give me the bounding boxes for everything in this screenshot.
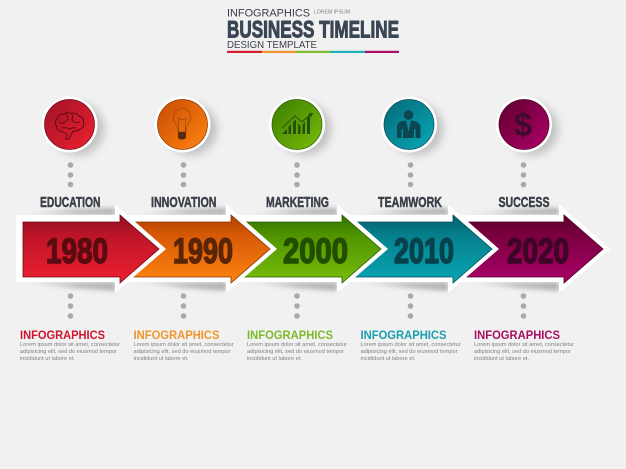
step 5: success 2020 <box>460 96 610 362</box>
step 2: innovation 1990 <box>127 96 277 362</box>
text block <box>20 328 120 362</box>
label: success: SUCCESS <box>498 194 550 211</box>
arrow 1990: 1990 <box>173 232 233 271</box>
text block: Lorem ipsum dolor sit amet, consectetur <box>20 342 120 348</box>
circle icon: brain <box>42 96 104 155</box>
dots lower <box>181 293 186 319</box>
label: innovation: INNOVATION <box>151 194 216 211</box>
dots upper <box>294 162 300 187</box>
text block: incididunt ut labore et. <box>20 356 75 362</box>
text block <box>474 328 574 362</box>
circle icon: dollar <box>496 96 558 155</box>
title: infographics: INFOGRAPHICS <box>227 8 310 20</box>
text block <box>134 328 234 362</box>
title colour bar <box>227 51 399 53</box>
text block: Lorem ipsum dolor sit amet, consectetur <box>247 342 347 348</box>
dots lower <box>294 293 300 319</box>
text block: incididunt ut labore et. <box>134 356 189 362</box>
arrow 1980 <box>16 204 166 293</box>
dots upper <box>181 162 186 187</box>
text block: INFOGRAPHICS <box>20 328 105 342</box>
dots upper <box>408 162 413 187</box>
title block <box>227 8 399 53</box>
arrow 2020 <box>460 204 610 293</box>
text block <box>247 328 347 362</box>
dots lower <box>408 293 413 319</box>
dots lower <box>68 293 73 319</box>
text block: INFOGRAPHICS <box>474 328 560 342</box>
text block: Lorem ipsum dolor sit amet, consectetur <box>360 342 461 348</box>
arrow 2000 <box>238 204 388 293</box>
title: lorem ipsum: LOREM IPSUM <box>314 10 350 16</box>
text block: incididunt ut labore et. <box>474 356 529 362</box>
label: education: EDUCATION <box>40 194 100 211</box>
circle icon: dollar: $ <box>514 106 532 143</box>
text block: incididunt ut labore et. <box>360 356 416 362</box>
title: business timeline: BUSINESS TIMELINE <box>227 16 399 44</box>
arrow 1980: 1980 <box>46 232 108 271</box>
step 1: education 1980 <box>16 96 166 362</box>
circle icon: growth chart <box>269 96 331 155</box>
text block: adipisicing elit, sed do eiusmod tempor <box>474 349 571 355</box>
text block: incididunt ut labore et. <box>247 356 302 362</box>
arrow 2000: 2000 <box>283 232 348 271</box>
dots lower <box>521 293 526 319</box>
text block: INFOGRAPHICS <box>134 328 220 342</box>
arrow 1990 <box>127 204 277 293</box>
text block <box>360 328 461 362</box>
circle icon: light bulb <box>154 96 217 155</box>
text block: INFOGRAPHICS <box>247 328 333 342</box>
step 4: teamwork 2010 <box>349 96 499 362</box>
text block: adipisicing elit, sed do eiusmod tempor <box>360 349 458 355</box>
dots upper <box>521 162 526 187</box>
title: design template: DESIGN TEMPLATE <box>227 40 317 51</box>
text block: adipisicing elit, sed do eiusmod tempor <box>247 349 344 355</box>
arrow 2020: 2020 <box>507 232 569 271</box>
circle icon: businessman <box>381 96 443 155</box>
text block: Lorem ipsum dolor sit amet, consectetur <box>474 342 574 348</box>
text block: Lorem ipsum dolor sit amet, consectetur <box>134 342 234 348</box>
text block: adipisicing elit, sed do eiusmod tempor <box>134 349 231 355</box>
dots upper <box>68 162 73 187</box>
arrow 2010: 2010 <box>394 232 454 271</box>
arrow 2010 <box>349 204 499 293</box>
label: marketing: MARKETING <box>266 194 329 211</box>
text block: INFOGRAPHICS <box>360 328 446 342</box>
label: teamwork: TEAMWORK <box>378 194 442 211</box>
step 3: marketing 2000 <box>238 96 388 362</box>
text block: adipisicing elit, sed do eiusmod tempor <box>20 349 117 355</box>
